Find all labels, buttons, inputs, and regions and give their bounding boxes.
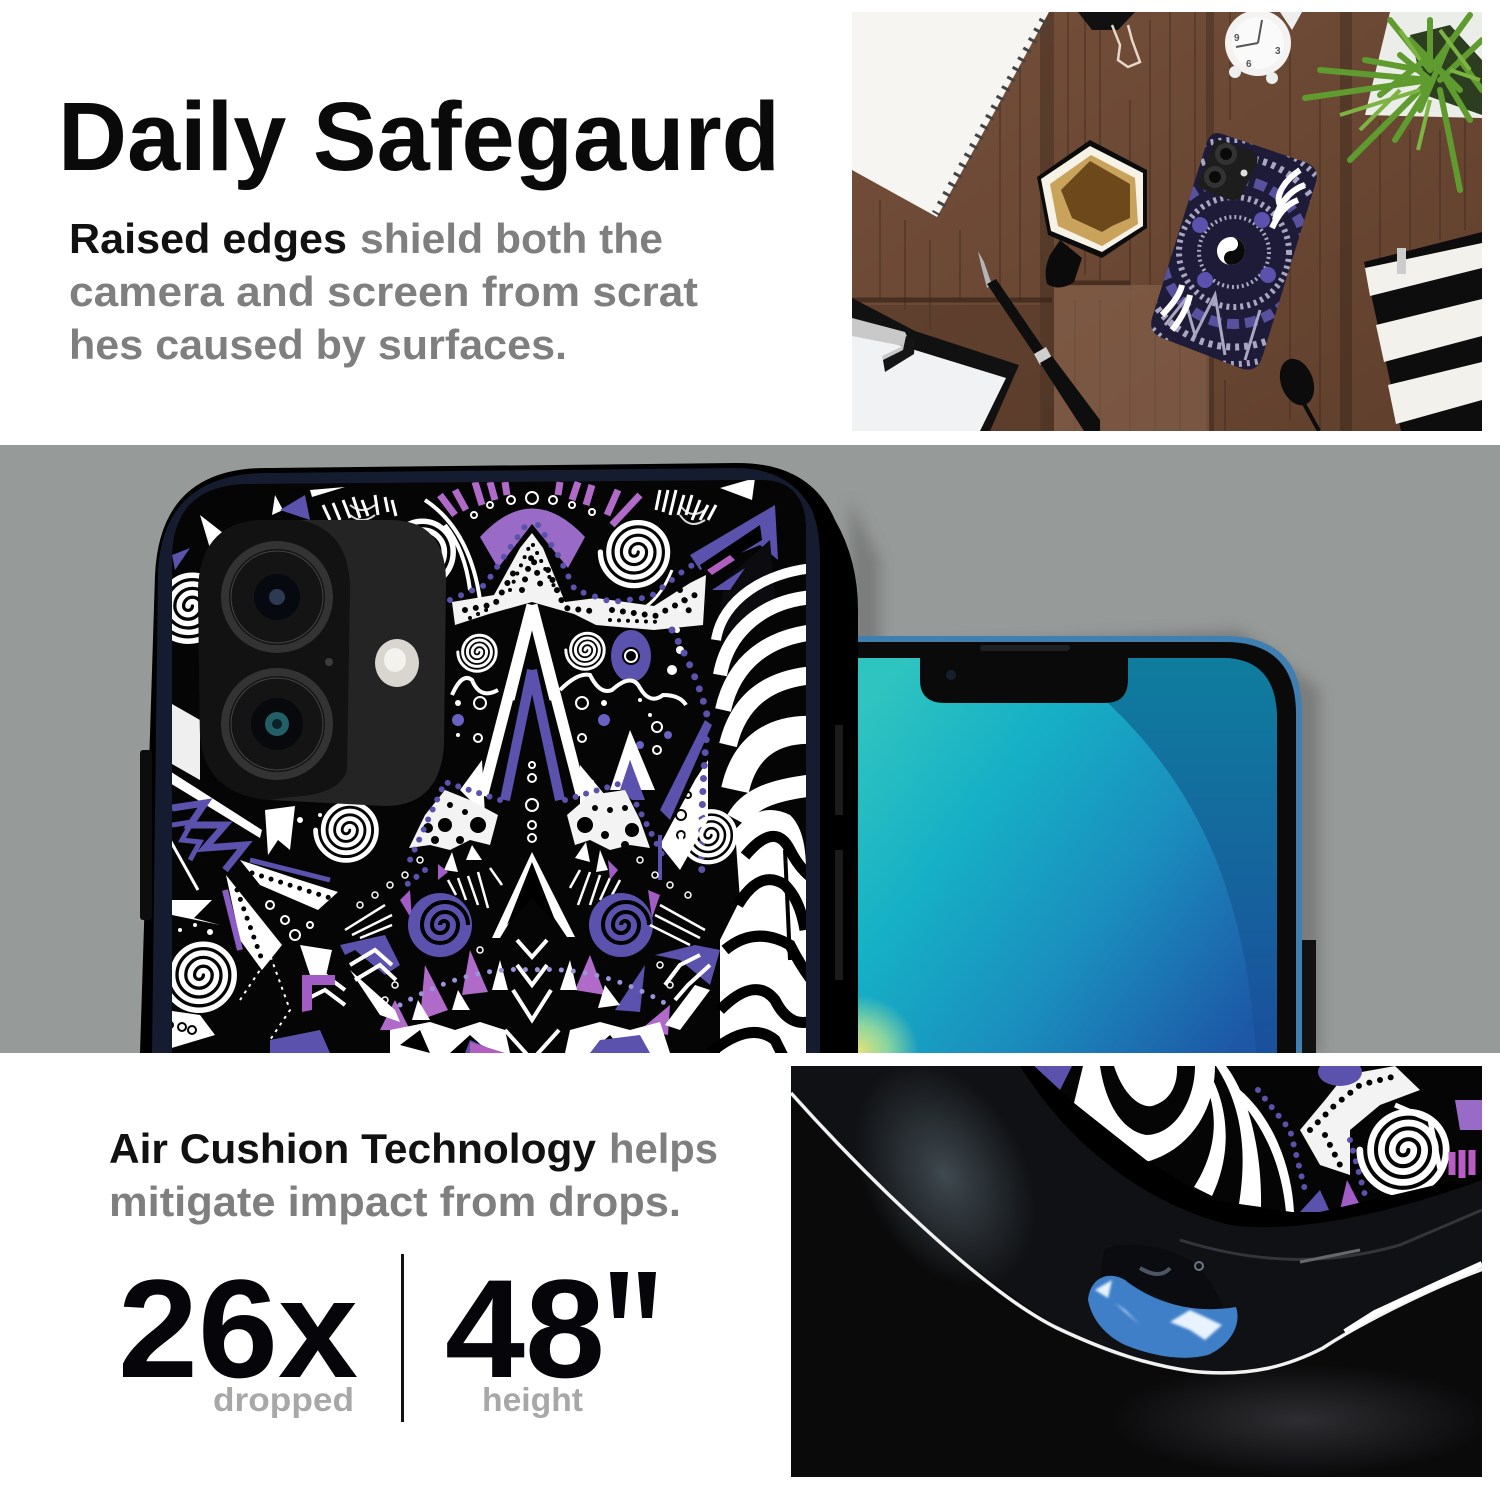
dotted white star: [452, 533, 706, 630]
text block: raised edges: Raised edges: [69, 215, 347, 262]
coffee cup: [1037, 140, 1147, 288]
gray band: [0, 445, 1500, 1053]
title: Daily Safegaurd: [58, 82, 780, 191]
screen wallpaper: [857, 658, 1277, 1053]
center spike: [470, 605, 595, 790]
rim highlights: [1180, 1210, 1482, 1259]
small phone: [1151, 133, 1317, 370]
stat: 48 inches height: height: [482, 1381, 583, 1418]
photo: phone on wooden desk: [852, 10, 1482, 431]
text block: air cushion: mitigate impact from drops.: [109, 1178, 681, 1225]
binder clip: [1078, 12, 1140, 67]
plant: [1305, 12, 1482, 190]
yin yang: [1217, 237, 1245, 265]
zebra stripes: [716, 568, 815, 820]
text block: air cushion: helps: [609, 1125, 718, 1172]
water drop: [1088, 1261, 1238, 1358]
phone case back: [140, 463, 858, 1060]
mandala artwork: [153, 478, 815, 1060]
clock: 6: [1246, 59, 1252, 70]
stat: 26x dropped: 26x: [118, 1250, 358, 1407]
text block: raised edges: camera and screen from scrat: [69, 268, 698, 315]
notch camera: [946, 670, 956, 680]
flash: [375, 639, 419, 687]
text block: raised edges: hes caused by surfaces.: [69, 321, 567, 368]
stat: 48 inches height: 48: [445, 1250, 605, 1407]
left side art: [172, 772, 262, 838]
clock: 9: [1234, 33, 1240, 44]
drop shadow of phones: [850, 500, 1320, 1053]
clock: 3: [1275, 46, 1281, 57]
spoon: [1280, 358, 1321, 431]
clock: [1225, 10, 1302, 84]
top right purple arrow: [690, 505, 778, 570]
camera module: [198, 520, 446, 806]
notebook: [852, 12, 1049, 217]
top edge marks: [200, 480, 755, 546]
text block: raised edges: [69, 215, 698, 368]
striped notebook: [1364, 232, 1482, 431]
text block: raised edges: shield both the: [360, 215, 663, 262]
phone front with teal screen: [840, 636, 1316, 1053]
divider: [401, 1254, 404, 1422]
top spirals: [600, 523, 668, 586]
text block: air cushion: [109, 1125, 718, 1225]
photo: bumper closeup with air cushion: [791, 1031, 1490, 1477]
upper lens: [221, 541, 333, 653]
lower mandala: [492, 852, 575, 938]
case bumper: [791, 1066, 1482, 1372]
artwork visible through case: [1034, 1058, 1484, 1216]
text block: air cushion: Air Cushion Technology: [109, 1125, 597, 1172]
clipboard: [852, 298, 1019, 431]
white edge line: [791, 1093, 1483, 1373]
stat: 48 inches height: [445, 1250, 656, 1418]
pen: [978, 251, 1100, 431]
middle swirls and doodles: [458, 635, 496, 671]
lower lens: [221, 668, 333, 780]
small phone camera: [1199, 140, 1258, 200]
stat: 26x dropped: dropped: [213, 1381, 354, 1418]
dotted white wings: [409, 790, 498, 850]
